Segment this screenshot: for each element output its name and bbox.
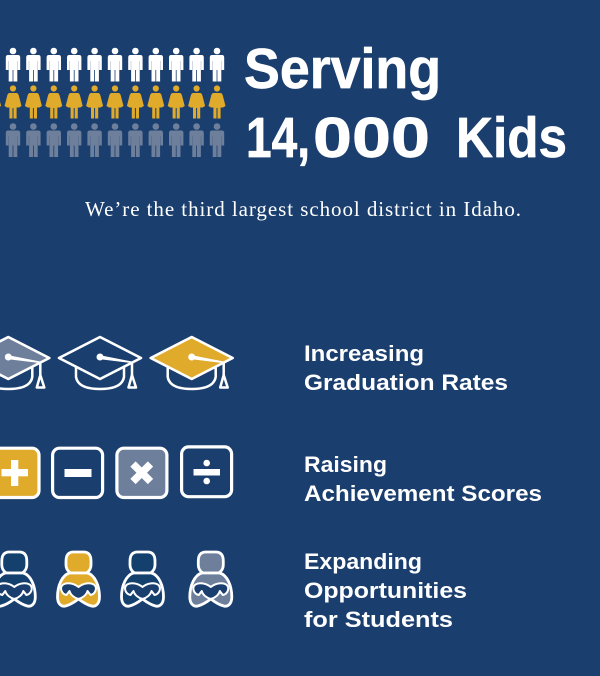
title: 000 (313, 106, 430, 170)
title: 14, (246, 106, 310, 170)
label: graduation rates: Graduation Rates (304, 370, 508, 395)
icon: navy reader (0, 552, 35, 606)
title (244, 37, 567, 170)
icon: multiply box (117, 448, 167, 498)
row of grey figures (6, 123, 224, 157)
icon: rows of people pictogram (0, 48, 225, 157)
icon: plus box (0, 448, 39, 498)
label: graduation rates: Increasing (304, 341, 424, 366)
icon: navy cap (59, 337, 141, 389)
label: opportunities: Expanding (304, 549, 422, 574)
icon row: students reading (0, 552, 232, 606)
title: Serving (244, 37, 441, 101)
icon: gold reader (58, 552, 100, 606)
label: achievement scores: Raising (304, 452, 387, 477)
label: graduation rates (304, 341, 508, 395)
icon: gold cap (151, 337, 233, 389)
icon row: graduation caps (0, 337, 233, 389)
label: opportunities: Opportunities (304, 578, 467, 603)
icon: divide box (182, 447, 232, 497)
row of white figures (6, 48, 224, 82)
icon: minus box (53, 448, 103, 498)
icon: grey cap (0, 337, 49, 389)
title: Kids (456, 106, 567, 170)
label: opportunities (304, 549, 467, 632)
icon: grey reader (190, 552, 232, 606)
subtitle: We’re the third largest school district in Idaho. (85, 197, 521, 221)
row of gold figures (0, 85, 225, 118)
label: achievement scores: Achievement Scores (304, 481, 542, 506)
icon: navy reader (122, 552, 164, 606)
icon row: math operators (0, 447, 232, 498)
label: achievement scores (304, 452, 542, 506)
label: opportunities: for Students (304, 607, 453, 632)
